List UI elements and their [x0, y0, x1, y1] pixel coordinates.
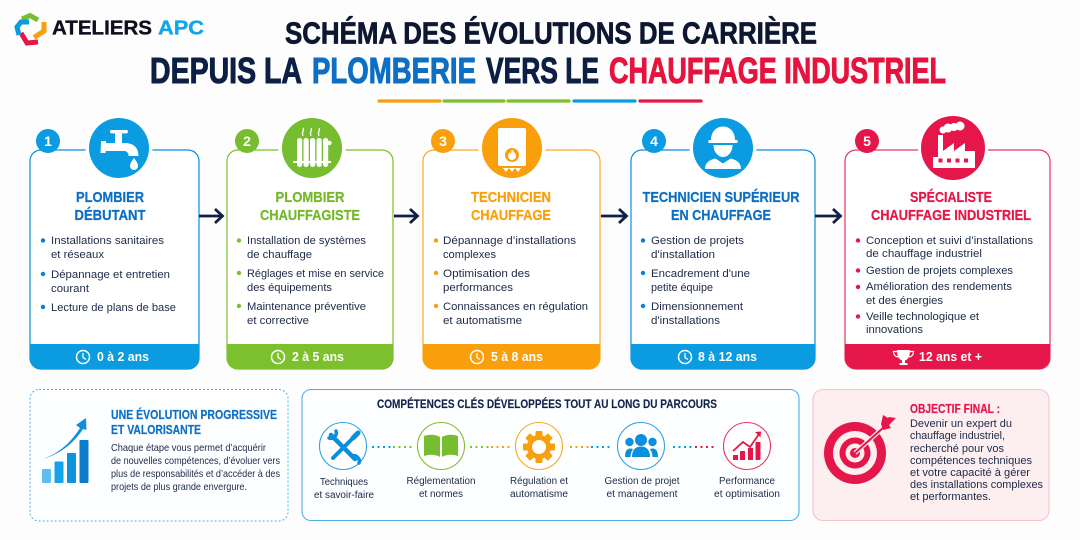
step number 5: 5 [863, 133, 871, 149]
bullet list [434, 235, 588, 327]
bullet list: innovations [866, 324, 924, 336]
skill: régulation: automatisme [510, 489, 568, 500]
step title: PLOMBIER [76, 189, 144, 206]
skill: réglementation: Réglementation [406, 476, 476, 487]
step number 2: 2 [243, 133, 251, 149]
step number 1: 1 [44, 133, 52, 149]
bullet list: de chauffage industriel [866, 248, 982, 260]
duration: 2 à 5 ans: 2 à 5 ans [292, 350, 344, 364]
text block: chauffage industriel, [910, 430, 1005, 442]
icon: worker with helmet [705, 126, 741, 169]
text block: de nouvelles compétences, d’évoluer vers [111, 456, 280, 467]
panel: step 3 technicien chauffage [423, 114, 600, 369]
panel: compétences clés [302, 390, 799, 520]
logo: Ateliers APC: APC [158, 18, 204, 40]
skill: performance [714, 422, 780, 500]
duration: 0 à 2 ans: 0 à 2 ans [97, 350, 149, 364]
step title: SPÉCIALISTE [910, 189, 992, 206]
panel: step 1 plombier débutant [30, 114, 199, 369]
skill: régulation [510, 422, 568, 500]
bullet list: Maintenance préventive [247, 301, 366, 313]
bullet list: Amélioration des rendements [866, 281, 1013, 293]
skill: performance: Performance [719, 476, 775, 487]
bullet list: Dépannage et entretien [51, 269, 170, 281]
icon: factory [933, 122, 975, 168]
bullet list: et réseaux [51, 249, 105, 261]
bullet list: Installation de systèmes [247, 235, 367, 247]
duration: 12 ans et +: 12 ans et + [919, 350, 982, 364]
bullet list: Gestion de projets [651, 235, 745, 247]
bullet list: d'installation [651, 249, 715, 261]
bullet list: Réglages et mise en service [247, 268, 384, 280]
dotted connector [570, 446, 611, 448]
heading: OBJECTIF FINAL : [910, 402, 1000, 416]
step number 4: 4 [650, 133, 658, 149]
bullet list: et corrective [247, 315, 309, 327]
bullet list: complexes [443, 249, 497, 261]
step title [74, 189, 146, 224]
step title [471, 189, 551, 224]
text block: et votre capacité à gérer [910, 467, 1030, 479]
skill: gestion de projet: et management [606, 489, 678, 500]
bullet list: et automatisme [443, 315, 522, 327]
skill: réglementation [406, 422, 476, 500]
step number 3: 3 [439, 133, 447, 149]
duration: 5 à 8 ans: 5 à 8 ans [491, 350, 543, 364]
title: CHAUFFAGE INDUSTRIEL [609, 50, 946, 91]
bullet list [856, 235, 1034, 336]
step title [871, 189, 1031, 224]
bullet list: Dimensionnement [651, 301, 743, 313]
title: PLOMBERIE [312, 50, 476, 91]
step number 5 [855, 129, 879, 153]
bullet list: Veille technologique et [866, 311, 979, 323]
duration: 12 ans et + [894, 350, 982, 365]
heading: ET VALORISANTE [111, 423, 201, 437]
title colour underline [379, 99, 701, 103]
title: VERS LE [486, 50, 599, 91]
step title: DÉBUTANT [74, 207, 146, 224]
arrow 4 to 5 [815, 209, 840, 223]
step number 3 [431, 129, 455, 153]
step title: EN CHAUFFAGE [671, 207, 771, 224]
bullet list: Connaissances en régulation [443, 301, 588, 313]
step title: CHAUFFAGE INDUSTRIEL [871, 207, 1031, 224]
icon: radiator [293, 128, 332, 167]
bullet list: performances [443, 282, 514, 294]
text block: recherché pour vos [910, 443, 1004, 455]
icon: rising bar chart [42, 418, 88, 483]
bullet list: Encadrement d'une [651, 268, 750, 280]
icon: boiler [498, 128, 526, 172]
skill: techniques: Techniques [320, 477, 368, 488]
panel: step 2 plombier chauffagiste [227, 114, 393, 369]
step title: CHAUFFAGISTE [260, 207, 360, 224]
bullet list: Dépannage d’installations [443, 235, 577, 247]
bullet list: Gestion de projets complexes [866, 265, 1013, 277]
icon: faucet [100, 130, 138, 170]
text block: et performantes. [910, 491, 991, 503]
skill: régulation: Régulation et [510, 476, 568, 487]
text block [910, 418, 1043, 503]
logo: Ateliers APC [17, 16, 204, 43]
text block: plus de responsabilités et d’accéder à des [111, 469, 280, 480]
bullet list: et des énergies [866, 295, 944, 307]
text block: compétences techniques [910, 455, 1033, 467]
skill: techniques [314, 422, 374, 501]
title: DEPUIS LA [150, 50, 302, 91]
skill: réglementation: et normes [419, 489, 463, 500]
dotted connector [372, 446, 413, 448]
skill: gestion de projet [604, 422, 680, 500]
dotted connector [470, 446, 511, 448]
bullet list: d'installations [651, 315, 721, 327]
icon: target with arrow [824, 415, 896, 484]
skill: gestion de projet: Gestion de projet [604, 476, 680, 487]
text block: Chaque étape vous permet d’acquérir [111, 443, 266, 454]
bullet list: des équipements [247, 282, 333, 294]
bullet list: Conception et suivi d’installations [866, 235, 1034, 247]
text block: des installations complexes [910, 479, 1043, 491]
title [150, 16, 946, 91]
arrow 3 to 4 [601, 209, 626, 223]
title: SCHÉMA DES ÉVOLUTIONS DE CARRIÈRE [285, 16, 817, 50]
dotted connector [673, 446, 715, 448]
logo: Ateliers APC: ATELIERS [52, 18, 152, 40]
step title [260, 189, 360, 224]
panel: objectif final [813, 390, 1049, 520]
bullet list: de chauffage [247, 249, 312, 261]
step number 1 [36, 129, 60, 153]
text block [111, 443, 280, 493]
bullet list [237, 235, 384, 327]
step title: CHAUFFAGE [471, 207, 551, 224]
heading: UNE ÉVOLUTION PROGRESSIVE [111, 407, 277, 422]
step title: TECHNICIEN [471, 189, 551, 206]
step title [642, 189, 800, 224]
arrow 2 to 3 [394, 209, 418, 223]
skill: techniques: et savoir-faire [314, 490, 374, 501]
bullet list: Installations sanitaires [51, 235, 165, 247]
step number 2 [235, 129, 259, 153]
text block: Devenir un expert du [910, 418, 1012, 430]
step title: TECHNICIEN SUPÉRIEUR [642, 189, 800, 206]
heading [111, 407, 277, 437]
duration: 8 à 12 ans: 8 à 12 ans [698, 350, 757, 364]
bullet list [41, 235, 176, 314]
step title: PLOMBIER [276, 189, 345, 206]
panel: step 4 technicien supérieur [631, 114, 815, 369]
heading: COMPÉTENCES CLÉS DÉVELOPPÉES TOUT AU LONG DU PARCOURS [377, 396, 717, 411]
bullet list: Lecture de plans de base [51, 302, 176, 314]
bullet list [641, 235, 750, 327]
arrow 1 to 2 [199, 209, 222, 223]
bullet list: petite équipe [651, 282, 713, 294]
panel: évolution progressive [30, 390, 288, 521]
panel: step 5 spécialiste chauffage industriel [845, 113, 1050, 369]
text block: projets de plus grande envergure. [111, 482, 247, 493]
skill: performance: et optimisation [714, 489, 780, 500]
bullet list: courant [51, 283, 89, 295]
bullet list: Optimisation des [443, 268, 531, 280]
step number 4 [642, 129, 666, 153]
